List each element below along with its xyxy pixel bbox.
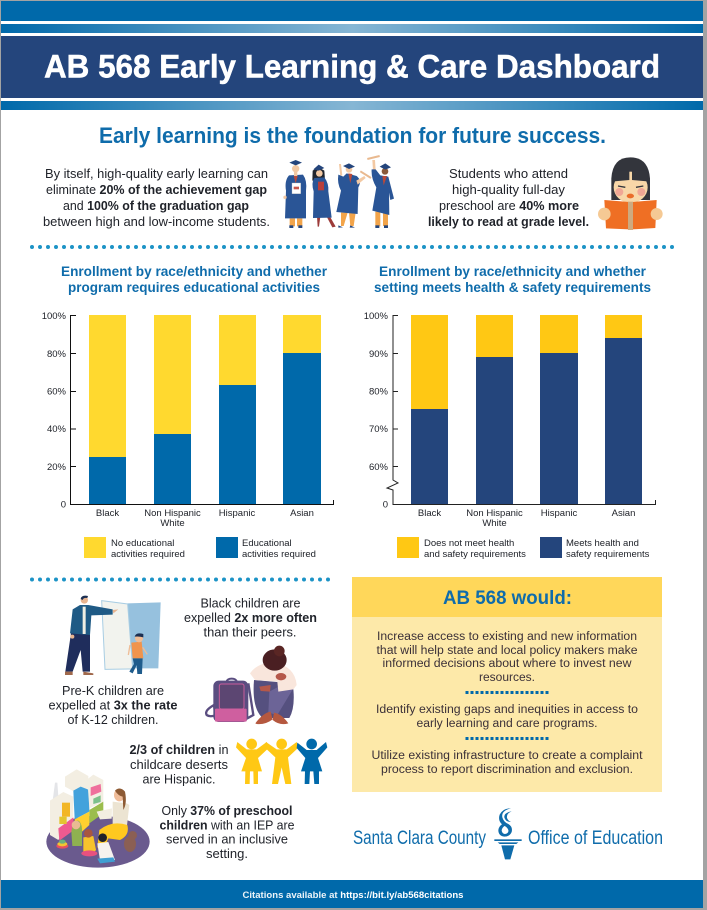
chart heading: setting meets health & safety requirements	[374, 280, 651, 295]
text: Pre-K children expelled	[48, 683, 178, 727]
text: reading at grade level: high-quality full-day	[452, 182, 565, 197]
blue child	[297, 739, 327, 784]
legend	[397, 537, 650, 560]
text: reading at grade level: likely to read at grade level.	[428, 214, 589, 229]
stacked bar chart: Hispanic	[219, 508, 255, 519]
chart heading	[61, 264, 328, 295]
graduate 2	[312, 165, 336, 227]
chart heading	[374, 264, 651, 295]
text: Black children expelled	[184, 596, 317, 640]
divider: lower dotted rule	[32, 578, 336, 582]
stacked bar chart: 80%	[369, 386, 389, 398]
legend: Does not meet health	[424, 538, 514, 549]
icon: three paper-doll children	[236, 739, 327, 784]
text: childcare deserts: 2/3 of children in	[130, 742, 229, 757]
text: achievement gap: and 100% of the graduation gap	[63, 198, 249, 213]
yellow child 2	[265, 739, 299, 784]
stacked bar chart: 80%	[47, 349, 67, 360]
text: IEP inclusive setting: children with an IEP are	[160, 818, 294, 832]
graduate 1	[283, 160, 306, 228]
text: reading at grade level: Students who attend	[449, 166, 568, 181]
stacked bar chart: 60%	[369, 462, 389, 473]
stacked bar chart: White	[160, 518, 185, 529]
item: access to information: Increase access to existing and new information	[377, 631, 637, 643]
text: Pre-K children expelled: of K-12 children.	[68, 712, 158, 727]
text: IEP inclusive setting: Only 37% of preschool	[162, 803, 292, 818]
header banner	[1, 1, 703, 110]
panel: AB 568 would	[352, 577, 662, 792]
stacked bar chart: Black	[418, 508, 441, 519]
graduate 4	[367, 156, 394, 228]
icon: girl reading book	[598, 157, 663, 230]
item: identify gaps: Identify existing gaps and inequities in access to	[376, 704, 638, 716]
panel: educational activities chart	[42, 264, 334, 560]
item: access to information: informed decisions about where to invest new	[382, 658, 632, 670]
chart heading: Enrollment by race/ethnicity and whether	[61, 264, 328, 279]
text: IEP inclusive setting: setting.	[206, 846, 248, 861]
item: access to information: resources.	[479, 672, 535, 684]
panel heading: AB 568 would:	[443, 588, 572, 609]
text: childcare deserts: childcare deserts	[130, 757, 228, 772]
text: IEP inclusive setting	[160, 803, 294, 861]
text: Black children expelled: Black children are	[200, 596, 300, 610]
text: childcare deserts: are Hispanic.	[142, 772, 216, 786]
stacked bar chart: 20%	[47, 462, 67, 473]
icon: torch	[494, 808, 522, 859]
stacked bar chart: 0	[61, 500, 66, 510]
legend: No educational	[111, 538, 174, 549]
text: achievement gap: eliminate 20% of the achievement gap	[46, 182, 267, 197]
chart heading: program requires educational activities	[68, 280, 320, 295]
text: achievement gap: By itself, high-quality early learning can	[45, 166, 268, 181]
stacked bar chart: 90%	[369, 349, 389, 360]
divider: top dotted rule	[32, 245, 675, 249]
text: reading at grade level: preschool are 40% more	[439, 198, 579, 213]
item: access to information: that will help state and local policy makers make	[376, 645, 638, 657]
stacked bar chart: Non Hispanic	[466, 508, 523, 519]
title: AB 568 Early Learning & Care Dashboard	[44, 48, 660, 84]
panel: health and safety chart	[364, 264, 656, 560]
text: childcare deserts	[130, 742, 229, 786]
item: complaint process: process to report discrimination and exclusion.	[381, 764, 633, 776]
chart heading: Enrollment by race/ethnicity and whether	[379, 264, 647, 279]
subheading: Early learning is the foundation for future success.	[99, 123, 606, 148]
stacked bar chart	[42, 311, 334, 529]
item: complaint process: Utilize existing infrastructure to create a complaint	[372, 750, 643, 762]
stacked bar chart: 40%	[47, 424, 67, 435]
text: Pre-K children expelled: Pre-K children are	[62, 683, 164, 698]
text: achievement gap	[43, 166, 270, 229]
item: identify gaps	[376, 704, 638, 730]
legend: Meets health and	[566, 538, 639, 549]
icon: teacher reading to children	[46, 769, 150, 868]
yellow child 1	[236, 739, 269, 784]
logo: Santa Clara County Office of Education: Office of Education	[528, 828, 663, 849]
logo: Santa Clara County Office of Education: Santa Clara County	[353, 828, 486, 849]
legend: safety requirements	[566, 549, 650, 560]
stacked bar chart: Asian	[290, 508, 314, 519]
stacked bar chart: 100%	[42, 311, 67, 322]
stacked bar chart: 100%	[364, 311, 389, 322]
stacked bar chart: Hispanic	[541, 508, 577, 519]
stacked bar chart: Non Hispanic	[144, 508, 201, 519]
item: access to information	[376, 631, 638, 684]
item: identify gaps: early learning and care programs.	[416, 718, 598, 730]
icon: graduates	[283, 156, 394, 228]
stacked bar chart: 60%	[47, 386, 67, 398]
legend: Educational	[242, 538, 292, 549]
text: Black children expelled: than their peers.	[204, 624, 296, 640]
stacked bar chart	[364, 311, 656, 529]
text: achievement gap: between high and low-income students.	[43, 214, 270, 229]
stacked bar chart: 70%	[369, 424, 389, 435]
icon: adult pointing child out of door	[65, 596, 161, 675]
citation: Citations available at https://bit.ly/ab568citations	[242, 890, 464, 900]
text: Black children expelled: expelled 2x more often	[184, 610, 317, 625]
legend: activities required	[111, 549, 185, 560]
stacked bar chart: Black	[96, 508, 119, 519]
text: Pre-K children expelled: expelled at 3x the rate	[48, 698, 178, 712]
item: complaint process	[372, 750, 643, 776]
logo: Santa Clara County Office of Education	[353, 808, 663, 859]
graduate 3	[336, 163, 371, 228]
legend: activities required	[242, 549, 316, 560]
stacked bar chart: White	[482, 518, 507, 529]
legend	[84, 537, 316, 560]
footer bar	[1, 880, 703, 908]
icon: sad child with backpack	[206, 646, 297, 724]
stacked bar chart: 0	[383, 500, 388, 510]
text: reading at grade level	[428, 166, 589, 229]
stacked bar chart: Asian	[612, 508, 635, 519]
text: IEP inclusive setting: served in an inclusive	[166, 832, 288, 846]
legend: and safety requirements	[424, 549, 526, 560]
